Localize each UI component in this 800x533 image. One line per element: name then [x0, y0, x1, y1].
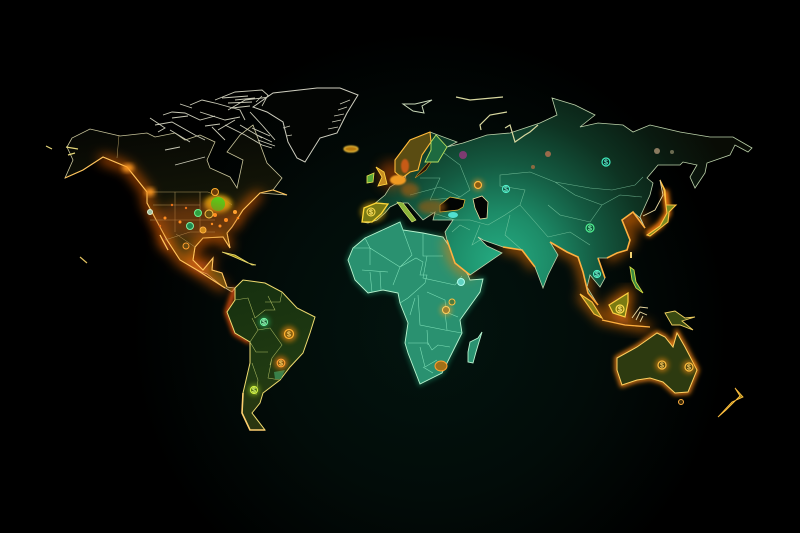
continent: Australia: [617, 333, 697, 404]
glow: Indonesia: [580, 293, 650, 328]
marker: Turkey: [448, 212, 458, 218]
Borneo: [609, 293, 628, 317]
Baja California: [160, 235, 168, 250]
Taiwan: [630, 252, 632, 258]
Java: [602, 320, 650, 327]
Svalbard: [403, 100, 432, 113]
coast: warm highlight: [447, 212, 645, 305]
Sumatra: [580, 294, 602, 318]
marker: Brazil: [281, 326, 297, 342]
New Guinea: [665, 311, 695, 330]
marker: Lakes ring: [212, 188, 218, 196]
marker: Midwest USA: [194, 210, 202, 216]
marker: Australia west: [655, 358, 669, 372]
coin markers: [148, 158, 696, 396]
New Zealand: [718, 388, 743, 417]
marker: Spain: $: [369, 210, 373, 216]
Cuba and Caribbean: [222, 252, 256, 265]
Italy: [397, 202, 416, 222]
Sakhalin strip: [643, 180, 663, 216]
borders: South America: [235, 292, 282, 395]
borders: US and Canada: [117, 135, 232, 247]
marker: Australia east: [682, 360, 696, 374]
land: Australia: [617, 333, 697, 393]
marker: Ohio: [205, 210, 213, 218]
marker: Paraguay: [274, 356, 288, 370]
Southeast Asia islands: [580, 252, 695, 330]
glow: Eurasia halo: [447, 212, 645, 293]
marker: Paraguay: $: [279, 360, 283, 368]
marker: Brazil: $: [287, 332, 291, 338]
marker: Australia east: $: [687, 364, 691, 372]
marker: Ukraine: [472, 179, 484, 191]
marker: Argentina: [248, 384, 260, 396]
glow: Africa halo: [348, 222, 483, 384]
marker: Kazakhstan: $: [504, 186, 508, 194]
Greenland: [253, 88, 358, 162]
Iberia glow: [360, 202, 386, 222]
continent: North America: [46, 90, 287, 292]
glow: southern Europe: [418, 200, 446, 214]
Iceland: [344, 146, 358, 152]
Iberia: [362, 203, 388, 222]
Madagascar: [468, 332, 482, 363]
marker: Kazakhstan: [502, 186, 510, 194]
continent: South America: [227, 280, 315, 430]
marker: Russia: $: [604, 160, 608, 166]
land: Eurasia: [362, 98, 752, 305]
Uruguay: [274, 370, 285, 379]
sea: North Sea glow: [378, 161, 406, 189]
continent: Eurasia: [362, 98, 752, 305]
marker: Australia west: $: [660, 362, 664, 370]
glow: Pacific and Gulf coast: [100, 158, 260, 288]
marker: Kenya: [449, 299, 455, 305]
Philippines: [630, 267, 643, 293]
marker: Spain: [367, 208, 375, 216]
marker: Borneo: $: [618, 306, 622, 314]
marker: Tanzania: [440, 304, 452, 316]
borders: Asia: [410, 150, 643, 250]
marker: Mexico: [183, 243, 189, 249]
sea: Adriatic: [400, 200, 418, 220]
marker: Amazon: $: [262, 320, 266, 326]
marker: California: [148, 210, 152, 214]
marker: China: $: [588, 226, 592, 232]
land: South America: [227, 280, 315, 430]
sea: Baltic: [415, 152, 434, 178]
continent: Africa: [348, 222, 483, 384]
hot spot: South Africa: [435, 361, 447, 371]
marker: Borneo: [616, 305, 624, 314]
Tasmania: [678, 400, 684, 404]
marker: Ethiopia: [458, 278, 464, 286]
borders: Africa: [353, 222, 462, 373]
Japan: [643, 180, 676, 236]
glow: Japan: [647, 190, 668, 235]
marker: Thailand: [594, 270, 600, 278]
Aleutian detail: [46, 146, 78, 155]
hot spot: Poland: [401, 159, 409, 173]
hot spots: USA: [122, 164, 239, 238]
coast: Pacific and Gulf highlight: [65, 157, 287, 288]
Sulawesi: [632, 307, 648, 322]
main islands: [647, 180, 676, 236]
marker: Amazon: [258, 316, 270, 328]
coast: Tierra del Fuego: [242, 393, 265, 430]
Scandinavia and Northern Europe: [360, 132, 447, 222]
hot spot: Germany: [390, 175, 406, 185]
land: Greenland: [253, 88, 358, 162]
east coast fjords: [256, 95, 350, 136]
Great Britain: [376, 167, 387, 186]
marker: Georgia: [200, 227, 206, 233]
Novaya Zemlya and Arctic islands: [456, 97, 538, 142]
marker: Thailand: $: [595, 272, 599, 278]
sea: Black Sea: [440, 197, 465, 212]
marker: Argentina: $: [252, 388, 256, 394]
glow: Australia: [617, 333, 697, 393]
land: Africa: [348, 222, 483, 384]
marker: Russia: [602, 158, 610, 166]
land: North America: [65, 125, 287, 292]
marker: Texas: [186, 222, 194, 230]
marker: China: [586, 224, 594, 232]
arctic islands: [150, 90, 275, 165]
sea: Caspian Sea: [473, 196, 488, 219]
Caucasus and Ural spots: [459, 148, 674, 169]
glow: Great Lakes: [204, 195, 232, 213]
Norway and Sweden: [395, 132, 431, 178]
glow: Pacific coast: [227, 288, 250, 342]
Hawaii: [80, 257, 87, 263]
Finland: [425, 135, 447, 162]
Ireland: [367, 173, 374, 183]
